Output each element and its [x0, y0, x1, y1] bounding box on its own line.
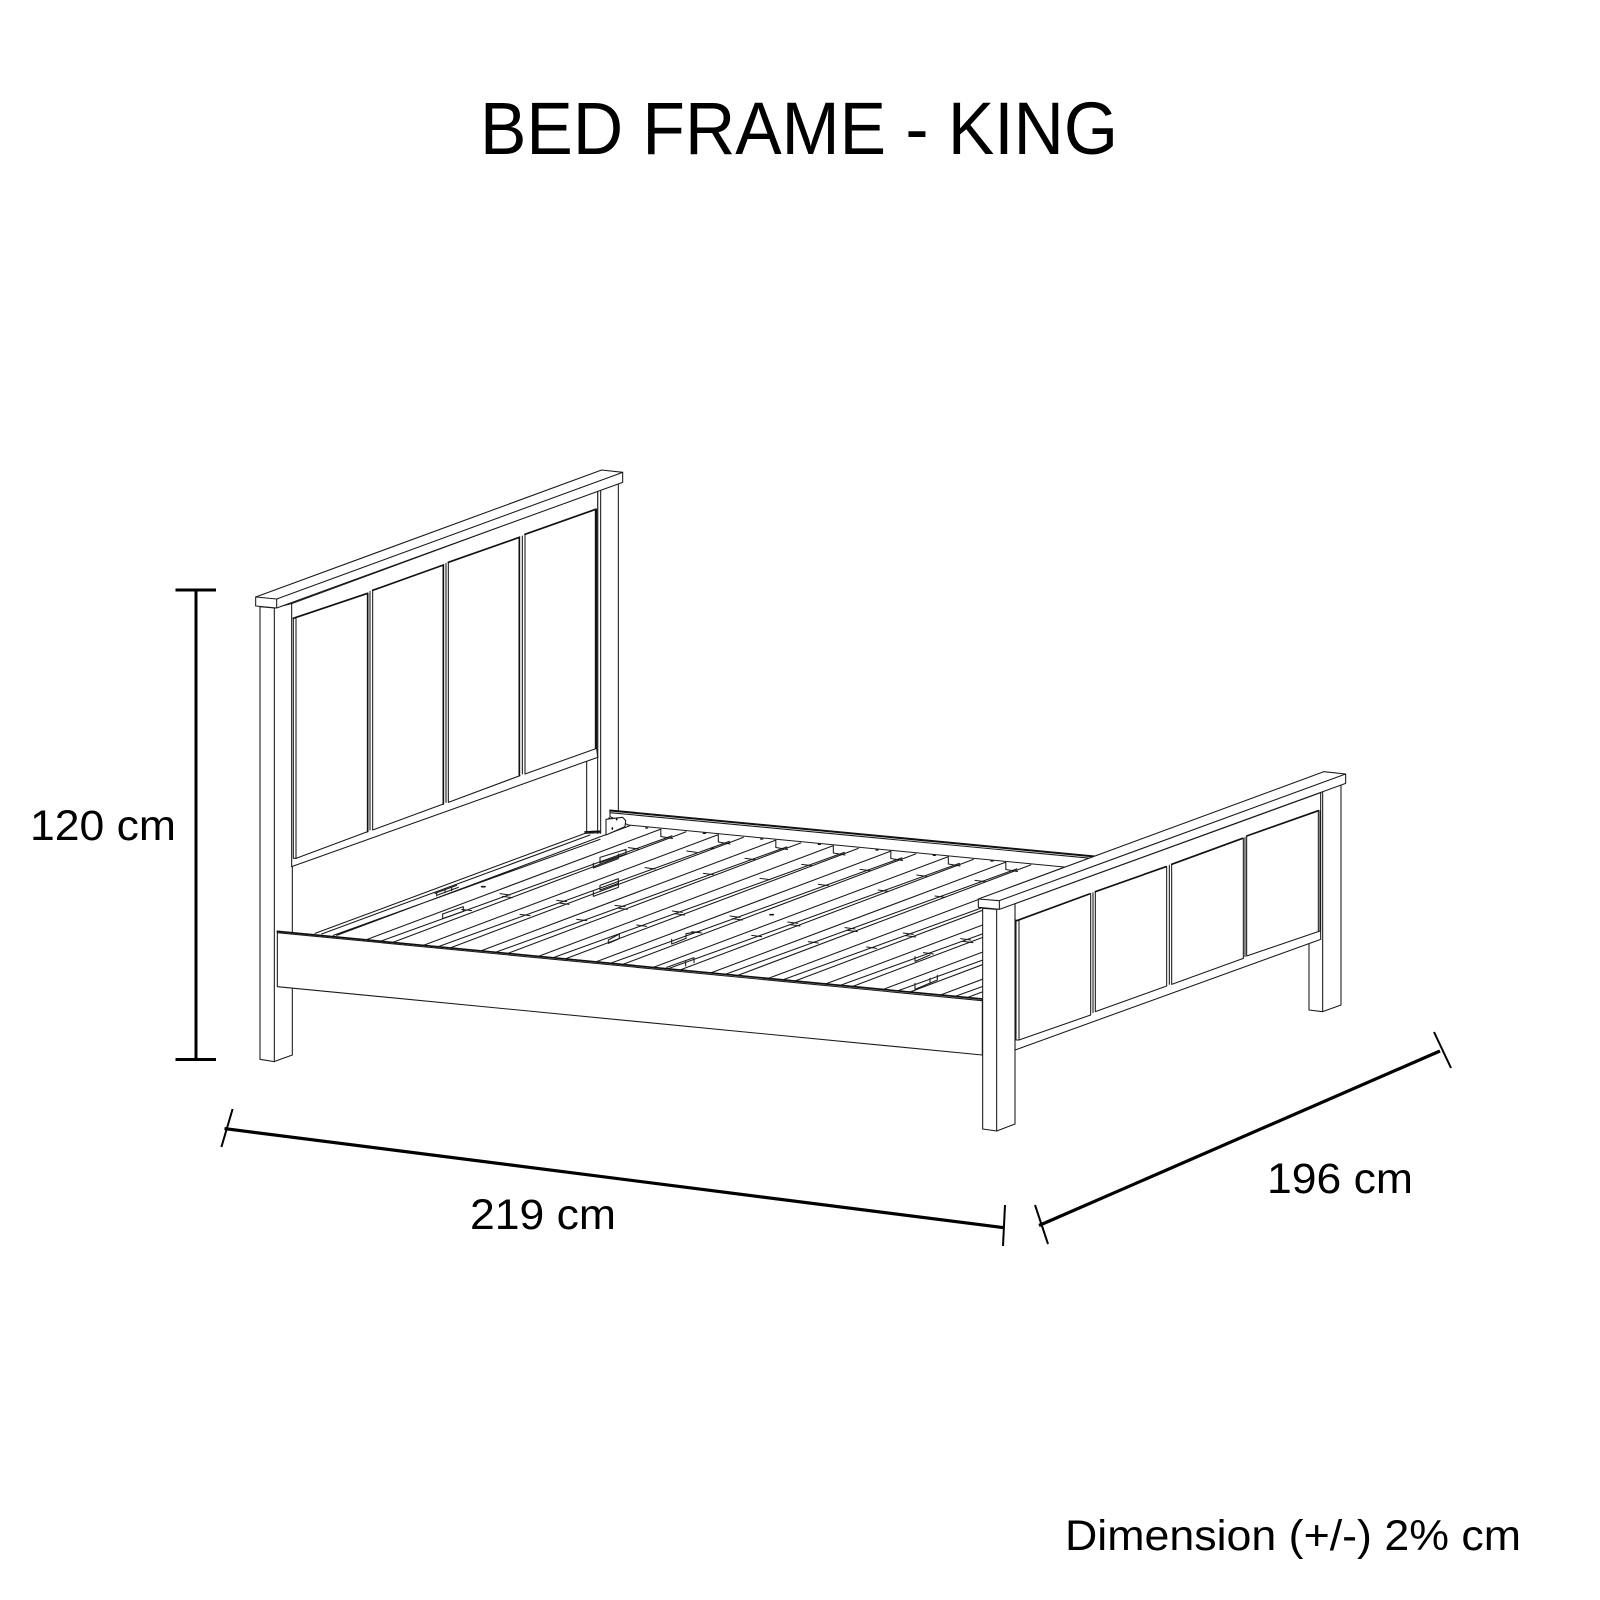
left post — [260, 603, 292, 1062]
slat deck — [314, 826, 1063, 997]
front side rail — [277, 931, 982, 1055]
bracket — [606, 817, 626, 835]
title: BED FRAME - KING — [480, 87, 1118, 170]
headboard cap — [256, 470, 623, 608]
rear rail fasteners — [646, 828, 993, 861]
footboard cap — [978, 772, 1346, 909]
rail below cap — [292, 491, 598, 867]
length label: 219 cm — [470, 1191, 616, 1239]
footboard panels — [1016, 811, 1320, 1040]
slat reinforcement boxes — [600, 849, 937, 989]
footboard right leg — [1309, 783, 1341, 1012]
footboard — [978, 772, 1346, 1131]
headboard panels — [293, 509, 598, 858]
width dimension — [1035, 1032, 1451, 1244]
headboard — [256, 470, 623, 1062]
length dimension — [221, 1109, 1005, 1246]
footboard panel frame — [1015, 793, 1321, 1050]
left side rail — [315, 826, 630, 935]
fastener dots — [482, 848, 773, 915]
width label: 196 cm — [1267, 1155, 1413, 1203]
right post — [587, 482, 618, 833]
height label: 120 cm — [30, 802, 176, 850]
slats and rails — [277, 810, 1261, 1055]
footboard left post — [983, 903, 1015, 1131]
cross-rail ticks — [500, 894, 973, 943]
rear side rail — [610, 810, 1095, 870]
bracket bolts — [609, 818, 617, 829]
height dimension — [176, 590, 216, 1060]
tolerance note: Dimension (+/-) 2% cm — [1065, 1512, 1521, 1560]
